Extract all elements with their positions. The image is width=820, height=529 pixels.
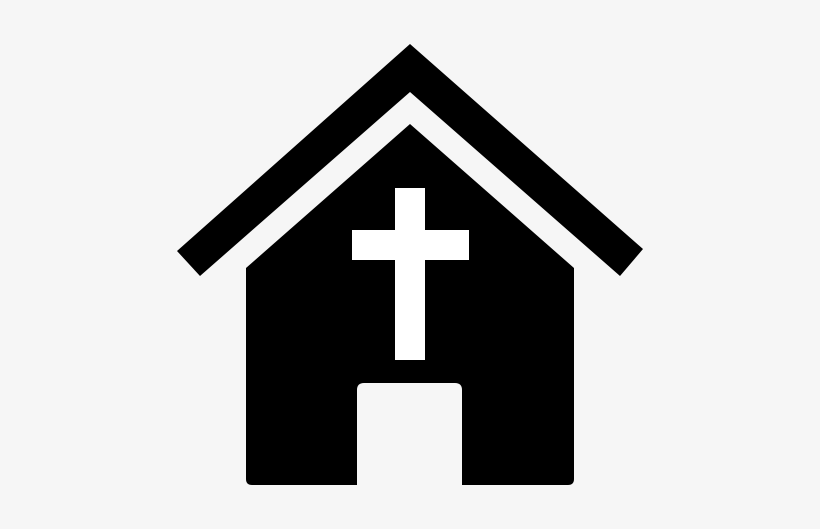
icon: cross: [352, 188, 469, 360]
icon: roof chevron: [177, 44, 643, 276]
icon: house body with door: [246, 124, 574, 485]
